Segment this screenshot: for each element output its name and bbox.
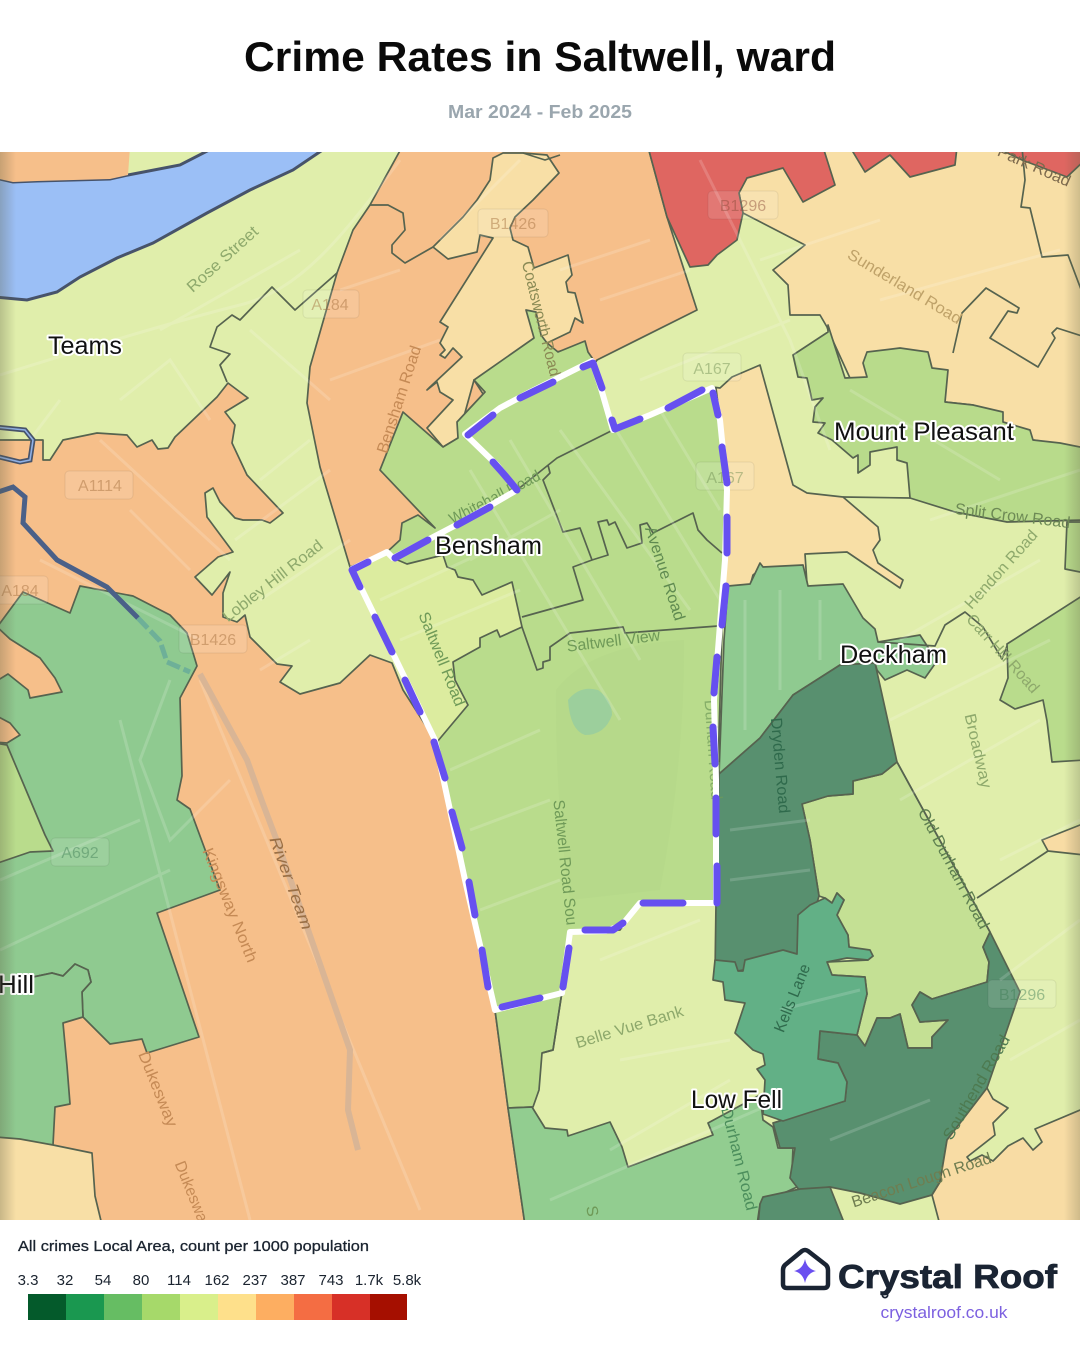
place label: Bensham: Bensham	[435, 532, 542, 560]
legend scale: 162	[204, 1272, 230, 1289]
road name labels: Durham Road	[701, 699, 724, 800]
title: Crime Rates in Saltwell, ward	[244, 33, 836, 80]
region: west light green pocket	[0, 743, 53, 864]
road shields: B1296	[999, 987, 1045, 1004]
region: bottom dark green	[758, 1186, 844, 1220]
region: west green lower block	[0, 964, 91, 1145]
legend scale: 80	[133, 1272, 149, 1289]
road shields	[0, 191, 1056, 1008]
region: south-east dark green	[773, 932, 1020, 1204]
legend scale: 387	[280, 1272, 306, 1289]
road network	[0, 160, 1080, 1220]
road name labels: Rose Street	[184, 223, 263, 296]
boundary lines between areas	[210, 147, 1080, 1053]
road name labels: Lobley Hill Road	[220, 537, 327, 626]
region: east green corner	[1065, 522, 1080, 573]
region: Old Durham Road green	[802, 762, 990, 1048]
legend scale: 3.3	[18, 1272, 38, 1289]
ward boundary: Saltwell	[352, 361, 727, 1010]
logo: Crystal Roof: Crystal Roof	[838, 1258, 1058, 1295]
road name labels: Saltwell Road Sou	[549, 799, 580, 926]
region: Deckham mid green	[719, 563, 937, 774]
River Team culvert	[138, 618, 190, 672]
railway line	[200, 674, 358, 1150]
road name labels: Whitehall Road	[447, 468, 543, 528]
road name labels: Split Crow Road	[954, 501, 1071, 532]
road name labels: Kingsway North	[198, 846, 260, 965]
canal waterway upper loop	[0, 427, 33, 462]
region: north-east yellow	[720, 147, 1080, 448]
region: Belle Vue Bank south green	[508, 1095, 797, 1225]
water: River Tyne	[0, 147, 327, 300]
road shields: B1296	[720, 198, 766, 215]
road name labels: Dukesway	[171, 1159, 214, 1232]
region: north central yellow	[427, 153, 590, 447]
road name labels: Carr Hill Road	[963, 611, 1042, 697]
region: west orange pocket two	[0, 715, 20, 743]
road name labels: S	[582, 1204, 601, 1218]
region: Saltwell Park shading	[556, 640, 684, 900]
road name labels: Broadway	[961, 712, 994, 790]
icon: park lake	[568, 689, 612, 735]
road shields: B1426	[490, 216, 536, 233]
road shields: B1426	[190, 632, 236, 649]
region: red corner	[1004, 152, 1080, 178]
legend scale: 54	[95, 1272, 111, 1289]
road name labels: Old Durham Road	[914, 806, 992, 932]
region: north central orange	[307, 147, 697, 567]
road name labels: Durham Road	[717, 1105, 759, 1212]
region: south-west orange	[0, 383, 525, 1225]
region: Dryden Road dark green	[715, 663, 897, 975]
subtitle: date range: Mar 2024 - Feb 2025	[448, 102, 632, 122]
map edge vignette	[0, 152, 1080, 1220]
road shields: A184	[311, 297, 349, 314]
road name labels: Beacon Lough Road	[850, 1150, 994, 1211]
road name labels: Avenue Road	[641, 524, 688, 623]
legend scale: 743	[318, 1272, 344, 1289]
logo: Crystal Roof	[783, 1250, 1058, 1298]
road name labels: Sunderland Road	[844, 246, 964, 328]
road name labels: Saltwell Road	[415, 610, 468, 709]
region: east green pocket	[1000, 594, 1080, 762]
legend title: All crimes Local Area, count per 1000 population	[18, 1238, 369, 1255]
road name labels: Park Road	[995, 143, 1073, 191]
place label: Teams: Teams	[48, 332, 122, 360]
road name labels	[134, 143, 1073, 1232]
place label: Deckham: Deckham	[840, 641, 947, 669]
road name labels: Dryden Road	[767, 717, 792, 814]
road shields: A184	[1, 583, 39, 600]
road name labels: River Team	[265, 835, 315, 932]
road shields: A167	[706, 470, 744, 487]
website link: crystalroof.co.uk	[880, 1304, 1008, 1322]
region: west orange pocket one	[0, 625, 62, 698]
region: south-west yellow	[0, 1137, 102, 1225]
region: west mid green	[0, 586, 220, 1053]
road name labels: Coatsworth Road	[518, 260, 563, 378]
region: north-west orange	[0, 152, 130, 182]
legend scale: 5.8k	[393, 1272, 422, 1289]
River Team waterway	[0, 487, 138, 618]
road shields: A1114	[78, 478, 122, 495]
region: south-east yellow	[932, 1088, 1080, 1225]
region: red high-crime area	[648, 147, 835, 267]
road name labels: Hendon Road	[962, 527, 1041, 613]
region: yellow east of ward	[712, 365, 903, 588]
legend scale	[18, 1272, 422, 1320]
region: east yellow pocket	[1042, 823, 1080, 855]
road name labels: Dukesway	[134, 1049, 180, 1130]
place label: Low Fell: Low Fell	[691, 1086, 782, 1114]
legend scale: 114	[167, 1272, 191, 1289]
road name labels: Bensham Road	[374, 344, 425, 455]
region: Saltwell ward and Bensham green	[350, 310, 727, 1108]
road name labels: Kells Lane	[771, 962, 814, 1035]
region: Saltwell Road light wedge	[350, 552, 522, 742]
road shields: A167	[693, 361, 731, 378]
region: Kells Lane emerald	[713, 893, 873, 1121]
region: Mount Pleasant green	[793, 325, 1080, 522]
road shields: A692	[61, 845, 99, 862]
road name labels: Saltwell View	[566, 627, 662, 656]
place label: Mount Pleasant: Mount Pleasant	[834, 418, 1014, 446]
road name labels: Belle Vue Bank	[574, 1003, 687, 1052]
road name labels: Southend Road	[940, 1032, 1014, 1143]
legend scale: 1.7k	[355, 1272, 384, 1289]
region: red strip top right	[852, 152, 958, 178]
legend scale: 237	[242, 1272, 268, 1289]
legend scale: 32	[57, 1272, 73, 1289]
